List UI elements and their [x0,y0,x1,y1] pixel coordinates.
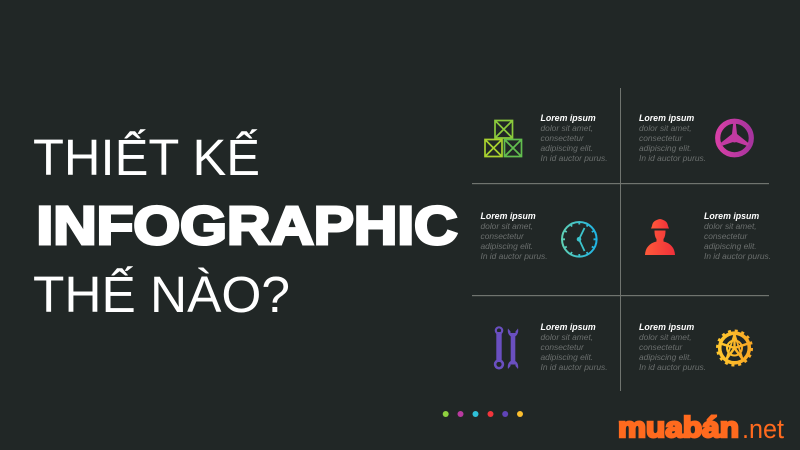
text block: adipiscing elit. [639,352,692,362]
panel: clock item [480,211,597,261]
text block: In id auctor purus. [540,153,608,163]
panel: boxes item [485,113,608,163]
title [33,128,458,323]
text block: dolor sit amet, [480,221,533,231]
text block: adipiscing elit. [480,241,533,251]
icon: gear with star [717,331,752,365]
text block: dolor sit amet, [540,123,593,133]
text block: adipiscing elit. [639,143,692,153]
text block: Lorem ipsum [639,322,694,332]
text block: consectetur [639,342,684,352]
icon: steering wheel [718,121,751,155]
text block: consectetur [704,231,749,241]
text block: adipiscing elit. [540,352,593,362]
pagination dots [443,411,523,417]
text block: consectetur [540,342,585,352]
text block: In id auctor purus. [540,362,608,372]
text block: Lorem ipsum [480,211,536,221]
text block: consectetur [639,133,684,143]
text block: dolor sit amet, [639,123,692,133]
text block: In id auctor purus. [704,251,771,261]
text block: Lorem ipsum [540,322,596,332]
title line: THIẾT KẾ: THIẾT KẾ [33,128,260,186]
vertical divider [620,88,621,391]
text block: dolor sit amet, [704,221,757,231]
icon: wrenches [495,327,518,369]
text block: In id auctor purus. [480,251,548,261]
text block: Lorem ipsum [639,113,694,123]
text block: dolor sit amet, [540,332,593,342]
icon: clock [562,222,597,257]
logo: muabán.net: muabán [618,412,739,444]
title line: INFOGRAPHIC: INFOGRAPHIC [36,196,458,256]
icon: worker with hard hat [645,219,675,255]
text block: adipiscing elit. [540,143,593,153]
panel: gear item [639,322,752,372]
horizontal divider bottom [472,295,769,296]
text block: dolor sit amet, [639,332,692,342]
text block: Lorem ipsum [540,113,596,123]
logo: muabán.net [618,412,784,444]
panel: steering wheel item [639,113,751,163]
icon: stacked crates [485,120,522,156]
text block: consectetur [540,133,585,143]
panel: wrenches item [495,322,608,372]
title line: THẾ NÀO?: THẾ NÀO? [33,265,290,323]
text block: In id auctor purus. [639,153,706,163]
horizontal divider top [472,183,769,184]
text block: consectetur [480,231,525,241]
logo: muabán.net: .net [742,414,784,444]
panel: worker item [645,211,771,261]
text block: Lorem ipsum [704,211,759,221]
text block: adipiscing elit. [704,241,757,251]
text block: In id auctor purus. [639,362,706,372]
